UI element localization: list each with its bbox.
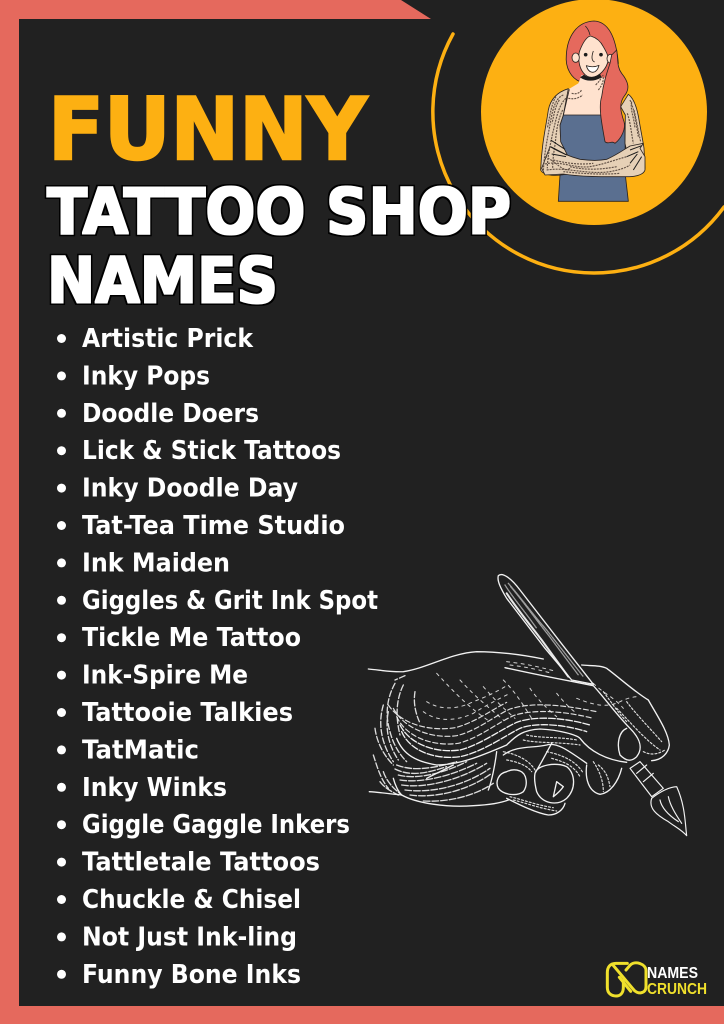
crossed forearm <box>542 143 645 177</box>
hair part <box>585 26 590 35</box>
name list: Chuckle & Chisel <box>82 885 301 915</box>
name list: Tat-Tea Time Studio <box>82 511 345 541</box>
neck shadow <box>580 74 602 81</box>
name list: Tickle Me Tattoo <box>82 623 301 653</box>
hair back <box>566 21 618 87</box>
pen ferrule and tip <box>630 762 687 836</box>
fingers <box>488 743 622 815</box>
dress <box>558 115 628 201</box>
logo wordmark NAMES: NAMES <box>647 965 698 982</box>
illustration: hand holding brush <box>368 575 687 836</box>
name list: Inky Pops <box>82 361 210 391</box>
name list: Inky Winks <box>82 773 227 803</box>
title: NAMES: NAMES <box>47 244 278 318</box>
logo wordmark CRUNCH: CRUNCH <box>647 981 707 998</box>
right arm <box>621 94 645 168</box>
logo: Names Crunch <box>607 963 707 998</box>
thumb and inner crease <box>397 729 627 765</box>
palm crease <box>505 668 640 760</box>
hand outline <box>368 652 669 761</box>
illustration: tattooed woman <box>541 21 645 201</box>
brush handle shading <box>507 593 568 677</box>
face <box>579 36 608 77</box>
name list: Doodle Doers <box>82 399 259 429</box>
wrist and lower palm <box>369 792 508 806</box>
engraved hatching: fingers <box>503 692 665 811</box>
name list: Not Just Ink-ling <box>82 922 297 952</box>
name list: Funny Bone Inks <box>82 960 301 990</box>
eyes <box>584 53 587 56</box>
decorative ring <box>433 34 724 273</box>
name list: Lick & Stick Tattoos <box>82 436 341 466</box>
tattoo scribbles <box>543 75 641 174</box>
name list: TatMatic <box>82 735 199 765</box>
brush handle <box>498 575 593 684</box>
name list: Tattletale Tattoos <box>82 848 320 878</box>
engraved hatching: lower palm <box>380 762 493 801</box>
hair front lock <box>600 50 628 143</box>
name list: Giggles & Grit Ink Spot <box>82 586 378 616</box>
engraved hatching: wrist curves <box>373 676 419 788</box>
ears <box>572 53 579 62</box>
engraved hatching: dense band over thumb crease <box>400 718 590 757</box>
name list: Tattooie Talkies <box>82 698 293 728</box>
name list: Artistic Prick <box>82 324 254 354</box>
name list: Ink Maiden <box>82 548 230 578</box>
title: FUNNY: FUNNY <box>48 80 369 180</box>
yellow circle <box>481 0 707 225</box>
name list <box>57 324 378 990</box>
name list: Giggle Gaggle Inkers <box>82 810 350 840</box>
name list: Inky Doodle Day <box>82 474 298 504</box>
title: TATTOO SHOP: TATTOO SHOP <box>47 176 511 248</box>
hand fingers <box>551 140 642 170</box>
skin: neck and chest <box>563 75 610 115</box>
smile <box>586 65 599 72</box>
logo mark <box>607 963 646 996</box>
name list: Ink-Spire Me <box>82 661 248 691</box>
strap <box>563 89 569 115</box>
nose <box>592 51 595 62</box>
bullets <box>57 334 66 979</box>
left arm <box>541 89 570 175</box>
